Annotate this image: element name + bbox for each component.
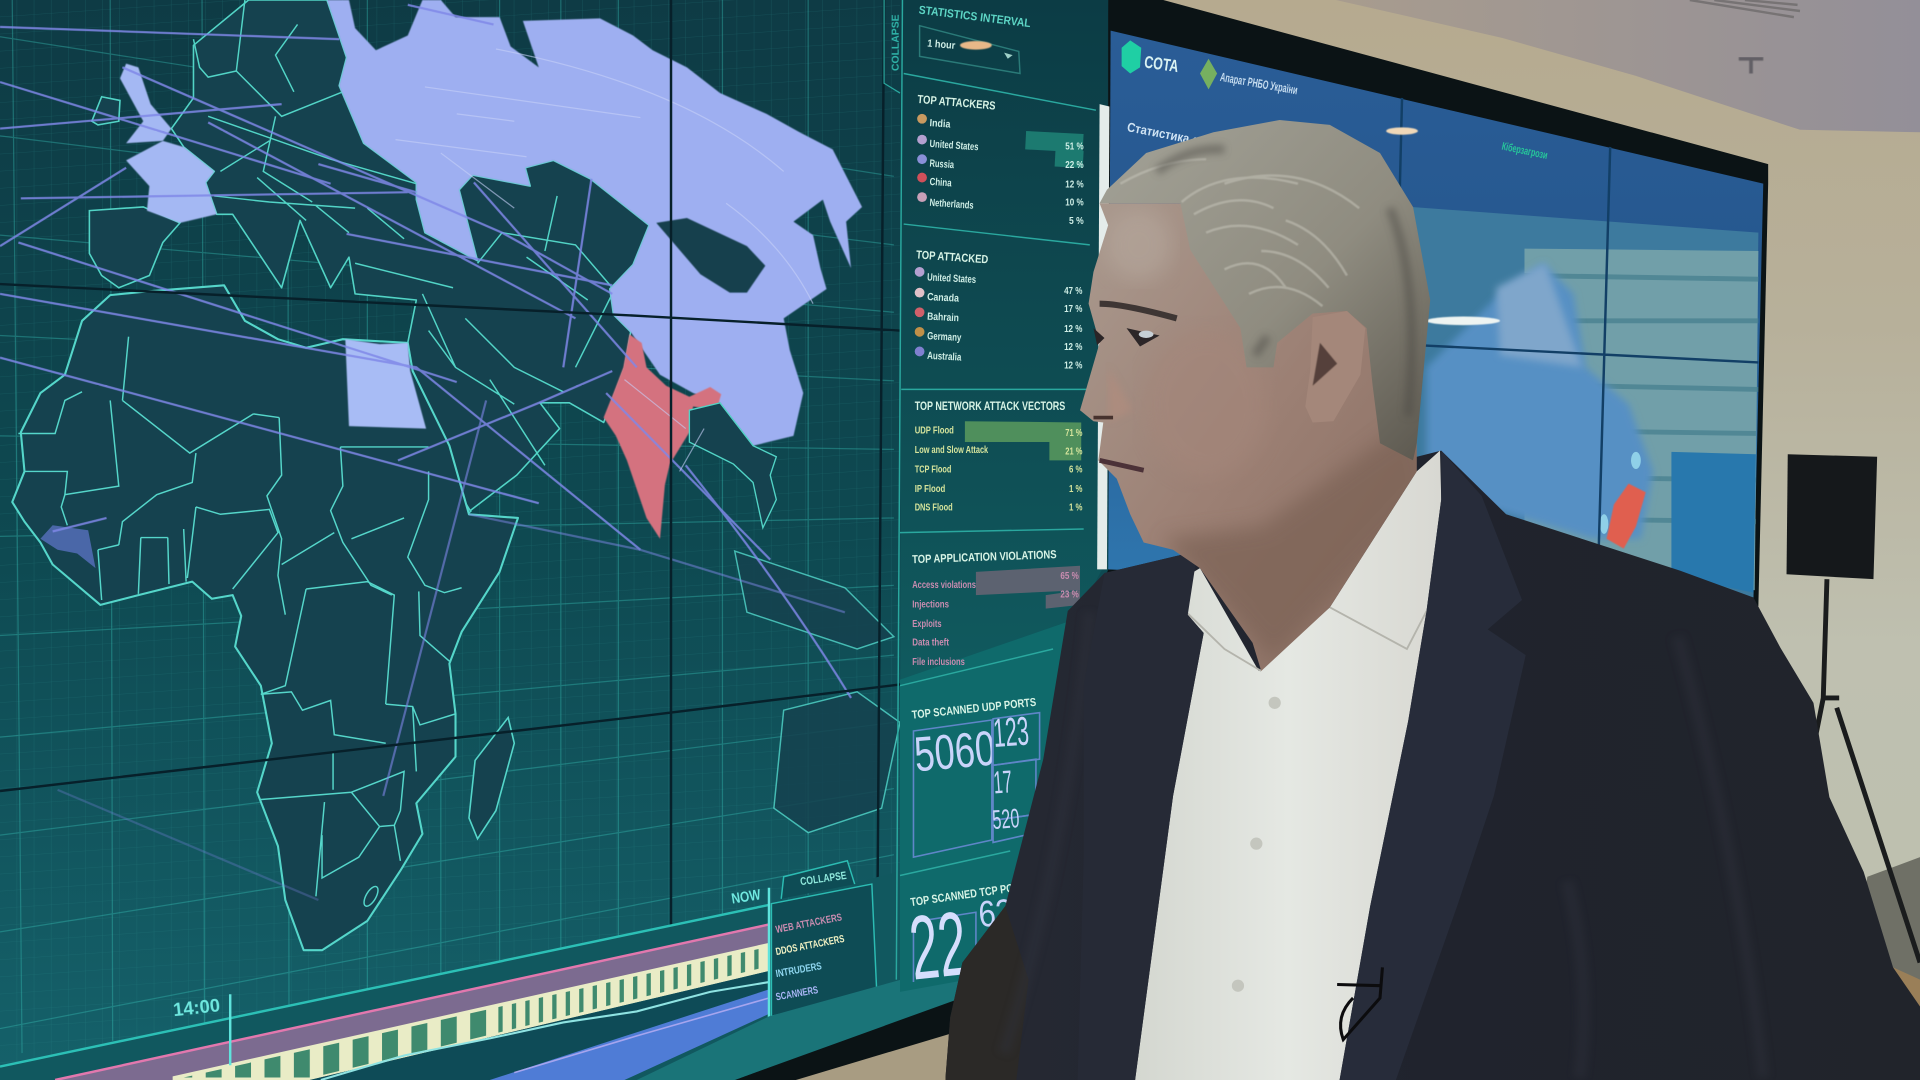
landmass: India highlighted: [604, 334, 721, 539]
mouth: [1100, 460, 1144, 470]
top attackers list: United States: [929, 139, 979, 153]
landmass: UK highlighted: [120, 64, 171, 143]
chart legend: SCANNERS: [775, 985, 819, 1003]
right lapel: [1340, 451, 1526, 1080]
head: face and neck: [1080, 203, 1417, 671]
far eye: [1093, 328, 1104, 345]
top network attack vectors list: Low and Slow Attack: [915, 445, 988, 456]
top application violations list: Data theft: [912, 637, 949, 648]
chart legend: [771, 884, 877, 1016]
ddos gaps right: [490, 948, 764, 1035]
logo: NSDC apparatus: [1200, 59, 1299, 97]
top attackers list: 12 %: [1065, 179, 1084, 190]
top scanned UDP ports treemap: [911, 696, 1040, 857]
trails over highlighted land: [396, 49, 813, 471]
scanners band: [490, 989, 769, 1080]
green tab label: Кіберзагрози: [1501, 141, 1549, 162]
top attackers list: Russia: [929, 159, 955, 171]
top network attack vectors list: 21 %: [1065, 446, 1082, 457]
hair highlights: [1120, 159, 1359, 306]
panel: world map display: [0, 0, 1108, 1080]
panel: Ukraine regional display: [1108, 31, 1763, 598]
top scanned TCP ports treemap: 63: [977, 891, 1014, 935]
collapse tab: COLLAPSE: [800, 870, 847, 888]
face shading: [1104, 208, 1433, 661]
hair: [1100, 120, 1430, 460]
top attackers list: TOP ATTACKERS: [917, 93, 996, 113]
top attacked list: 12 %: [1064, 324, 1082, 335]
intruders band: [310, 971, 769, 1080]
blazer fold shading: [1004, 612, 1763, 1078]
panel: timeline chart: [0, 857, 967, 1080]
top attacked list: Australia: [927, 351, 962, 364]
eye: [1127, 328, 1160, 347]
chart legend: INTRUDERS: [775, 961, 823, 980]
left lapel: [1078, 551, 1204, 1080]
map of Ukraine: [1427, 263, 1653, 539]
top attackers list: 22 %: [1065, 160, 1084, 171]
white edge strip: [1097, 104, 1109, 569]
top application violations list: TOP APPLICATION VIOLATIONS: [912, 548, 1057, 566]
landmass: Mongolia: [656, 218, 765, 293]
top application violations list: 65 %: [1060, 571, 1079, 582]
ear inner shadow: [1313, 343, 1337, 386]
top attackers list: [917, 93, 1084, 227]
top attacked list: Germany: [927, 331, 962, 344]
landmass: Ireland: [92, 97, 120, 125]
top attackers list: India: [929, 118, 951, 131]
top network attack vectors list: UDP Flood: [915, 425, 954, 436]
landmass: France highlighted: [126, 141, 217, 223]
collapse tab: [781, 861, 855, 899]
seams: [1393, 98, 1758, 576]
Africa country borders: [18, 337, 462, 896]
nose side shading: [1112, 390, 1126, 415]
attack arcs: [0, 5, 851, 900]
map background area: [1412, 207, 1758, 598]
ddos gaps left: [184, 1009, 490, 1078]
hair dark tones: [1157, 149, 1412, 416]
top attacked list: 17 %: [1064, 304, 1082, 315]
chart legend: WEB ATTACKERS: [775, 912, 843, 936]
top attacked list: 47 %: [1064, 286, 1082, 297]
top scanned UDP ports treemap: 17: [992, 763, 1013, 800]
landmass: Guinea highlighted: [40, 525, 96, 568]
cheek colouring: [1145, 331, 1267, 478]
top attackers list: 5 %: [1069, 216, 1084, 227]
speaker on tripod: [1787, 454, 1920, 962]
statistics interval selector: STATISTICS INTERVAL: [918, 4, 1031, 30]
lower right inset panel: [1671, 452, 1756, 593]
top attackers list: China: [929, 177, 952, 189]
map markers: [1600, 452, 1641, 534]
time marker now: NOW: [730, 887, 762, 908]
top application violations list: File inclusions: [912, 657, 965, 668]
panel: statistics sidebar: [884, 0, 1109, 999]
top network attack vectors list: 1 %: [1069, 484, 1082, 495]
top application violations list: Injections: [912, 599, 949, 610]
forehead highlight: [1112, 216, 1168, 276]
web attackers band: [55, 924, 769, 1080]
top attacked list: 12 %: [1064, 361, 1082, 372]
sleeve shading lower left: [945, 906, 1029, 1080]
top attackers list: 51 %: [1065, 141, 1084, 152]
top attackers list: Netherlands: [929, 198, 974, 212]
landmass: Indonesia and Australia outlines: [735, 551, 900, 833]
nose shadow: [1093, 416, 1113, 419]
collapse side tab: [884, 0, 902, 93]
top application violations list: [912, 548, 1080, 668]
statistics heading: Статистика об'єктів: [1126, 119, 1237, 155]
top network attack vectors list: [915, 400, 1082, 514]
statistics interval selector: 1 hour: [927, 39, 956, 52]
shirt buttons: [1232, 697, 1281, 992]
eyebrow: [1100, 304, 1177, 318]
horizontal reflections: [1524, 276, 1758, 522]
top network attack vectors list: TOP NETWORK ATTACK VECTORS: [915, 400, 1065, 413]
top scanned UDP ports treemap: 520: [991, 803, 1020, 835]
top attacked list: TOP ATTACKED: [916, 248, 989, 266]
top network attack vectors list: IP Flood: [915, 484, 945, 495]
Lesotho: [361, 884, 381, 908]
top application violations list: Access violations: [912, 580, 976, 591]
shirt: [1135, 451, 1441, 1080]
top scanned TCP ports treemap: TOP SCANNED TCP PORTS: [910, 879, 1033, 909]
top scanned UDP ports treemap: 123: [992, 708, 1030, 756]
landmass: Madagascar: [469, 718, 514, 839]
time marker 14:00: [172, 994, 230, 1065]
top network attack vectors list: 1 %: [1069, 503, 1082, 514]
lower screen edge: [637, 961, 967, 1080]
collapse side tab: COLLAPSE: [891, 14, 902, 71]
top network attack vectors list: 6 %: [1069, 465, 1082, 476]
collar folds: [1188, 607, 1427, 671]
chart legend: DDOS ATTACKERS: [775, 934, 845, 958]
statistics interval selector: [918, 4, 1031, 73]
top network attack vectors list: DNS Flood: [915, 503, 953, 514]
time marker 14:00: 14:00: [172, 995, 221, 1020]
ddos attackers band: [173, 943, 769, 1080]
landmass: Europe, Central Asia and Middle East: [171, 0, 649, 511]
top attacked list: United States: [927, 272, 976, 286]
logo: NSDC apparatus: Апарат РНБО України: [1219, 70, 1299, 97]
landmass: Egypt highlighted: [345, 339, 426, 429]
top attacked list: [915, 248, 1082, 372]
landmass: Russia and China highlighted: [327, 0, 862, 446]
timeline band background: [0, 857, 955, 1080]
top attacked list: 12 %: [1064, 342, 1082, 353]
highlighted red region: [1607, 484, 1646, 549]
landmass: Africa: [12, 285, 518, 950]
top scanned TCP ports treemap: 22: [905, 893, 972, 999]
landmass: Spain: [89, 207, 180, 288]
jaw and neck shadow: [1170, 441, 1416, 660]
blazer: [945, 451, 1920, 1080]
screen seams: [0, 0, 1102, 1053]
upper map lobe: [1496, 263, 1582, 367]
top attacked list: Canada: [927, 292, 959, 305]
logo: COTA: [1122, 40, 1180, 76]
glare on screen: [960, 41, 992, 50]
top network attack vectors list: TCP Flood: [915, 465, 951, 476]
lapel microphone: [1337, 967, 1382, 1040]
Europe and Asia borders: [193, 0, 612, 551]
landmass: South East Asia: [689, 403, 776, 528]
top application violations list: Exploits: [912, 619, 942, 630]
top application violations list: 23 %: [1060, 590, 1079, 601]
top attacked list: Bahrain: [927, 312, 959, 324]
person: man in dark blazer: [945, 120, 1920, 1080]
glare strips: [1427, 317, 1500, 325]
top scanned UDP ports treemap: 5060: [912, 722, 997, 782]
top attackers list: 10 %: [1065, 198, 1084, 209]
right striped area: [1524, 249, 1758, 590]
logo: COTA: COTA: [1143, 52, 1180, 76]
map grid lines: [0, 0, 894, 1053]
top network attack vectors list: 71 %: [1065, 428, 1082, 439]
ear: [1305, 311, 1365, 422]
top scanned UDP ports treemap: TOP SCANNED UDP PORTS: [911, 696, 1037, 722]
